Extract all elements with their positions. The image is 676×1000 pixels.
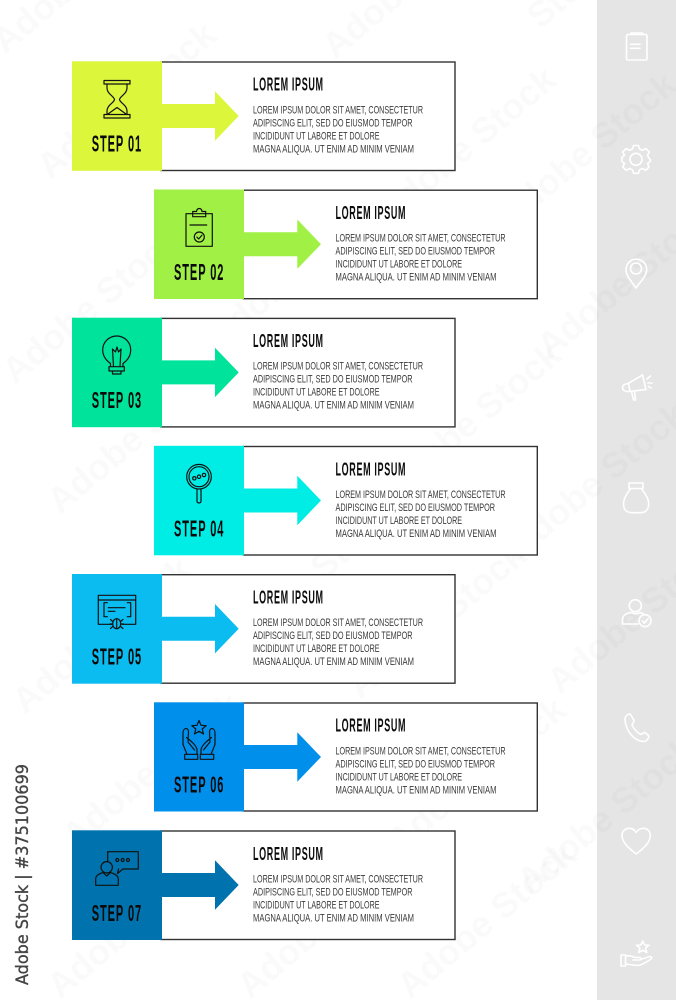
arrow: step 07 bbox=[161, 860, 239, 910]
text block: LOREM IPSUM DOLOR SIT AMET, CONSECTETUR bbox=[253, 617, 423, 629]
icon: magnifier bbox=[187, 464, 211, 503]
text block bbox=[336, 232, 506, 284]
panel: step 01 bbox=[72, 61, 455, 171]
text block: ADIPISCING ELIT, SED DO EIUSMOD TEMPOR bbox=[253, 630, 412, 642]
text block: LOREM IPSUM DOLOR SIT AMET, CONSECTETUR bbox=[253, 104, 423, 116]
step label: STEP 02 bbox=[174, 260, 223, 285]
arrow: step 03 bbox=[161, 348, 239, 397]
icon: code window with bug bbox=[98, 595, 136, 629]
icon: sidebar clipboard bbox=[626, 33, 647, 60]
text block: ADIPISCING ELIT, SED DO EIUSMOD TEMPOR bbox=[336, 246, 495, 258]
arrow: step 01 bbox=[161, 91, 239, 141]
text block: ADIPISCING ELIT, SED DO EIUSMOD TEMPOR bbox=[253, 117, 412, 129]
text block: INCIDIDUNT UT LABORE ET DOLORE bbox=[336, 515, 462, 527]
step label: STEP 04 bbox=[174, 516, 223, 541]
text block: MAGNA ALIQUA. UT ENIM AD MINIM VENIAM bbox=[253, 143, 414, 155]
icon: sidebar heart bbox=[622, 828, 650, 854]
icon: hourglass bbox=[104, 80, 130, 118]
text block: INCIDIDUNT UT LABORE ET DOLORE bbox=[336, 258, 462, 270]
text block bbox=[253, 873, 423, 924]
icon: light bulb bbox=[103, 336, 131, 374]
text block: LOREM IPSUM DOLOR SIT AMET, CONSECTETUR bbox=[336, 745, 506, 757]
text block bbox=[253, 361, 423, 412]
text block: INCIDIDUNT UT LABORE ET DOLORE bbox=[253, 130, 380, 142]
panel: right sidebar bbox=[597, 0, 676, 1000]
text block: INCIDIDUNT UT LABORE ET DOLORE bbox=[336, 771, 462, 783]
step label: STEP 07 bbox=[92, 900, 141, 926]
panel: step 07 bbox=[72, 830, 455, 940]
icon: sidebar megaphone bbox=[622, 375, 652, 400]
icon: sidebar money bag bbox=[624, 483, 649, 513]
text block: MAGNA ALIQUA. UT ENIM AD MINIM VENIAM bbox=[336, 528, 496, 540]
text block: LOREM IPSUM DOLOR SIT AMET, CONSECTETUR bbox=[336, 232, 506, 244]
arrow: step 05 bbox=[161, 604, 239, 653]
icon: clipboard bbox=[186, 208, 212, 246]
text block bbox=[336, 745, 506, 796]
text block: MAGNA ALIQUA. UT ENIM AD MINIM VENIAM bbox=[253, 400, 414, 412]
panel: step 03 bbox=[72, 318, 455, 427]
icon: sidebar location pin bbox=[626, 259, 647, 288]
step label: STEP 06 bbox=[174, 772, 223, 798]
text block: ADIPISCING ELIT, SED DO EIUSMOD TEMPOR bbox=[253, 374, 412, 386]
step label: STEP 05 bbox=[92, 644, 141, 670]
panel: step 05 bbox=[72, 574, 455, 684]
text block: ADIPISCING ELIT, SED DO EIUSMOD TEMPOR bbox=[336, 758, 495, 770]
arrow: step 06 bbox=[243, 732, 321, 782]
icon: sidebar gear bbox=[622, 146, 650, 173]
heading: LOREM IPSUM bbox=[253, 845, 323, 865]
icon: person with speech bubble bbox=[96, 852, 138, 885]
credit: vertical stock id: Adobe Stock | #375100699 bbox=[13, 764, 33, 985]
text block: INCIDIDUNT UT LABORE ET DOLORE bbox=[253, 643, 380, 655]
step label: STEP 01 bbox=[92, 131, 141, 157]
icon: sidebar user with check bbox=[622, 600, 651, 627]
text block bbox=[336, 489, 506, 540]
text block: LOREM IPSUM DOLOR SIT AMET, CONSECTETUR bbox=[253, 361, 423, 373]
heading: LOREM IPSUM bbox=[253, 76, 323, 96]
text block: LOREM IPSUM DOLOR SIT AMET, CONSECTETUR bbox=[336, 489, 506, 501]
icon: sidebar hand with star bbox=[621, 941, 652, 966]
arrow: step 02 bbox=[243, 220, 321, 269]
arrow: step 04 bbox=[243, 476, 321, 525]
text block: MAGNA ALIQUA. UT ENIM AD MINIM VENIAM bbox=[336, 784, 496, 796]
text block: MAGNA ALIQUA. UT ENIM AD MINIM VENIAM bbox=[336, 272, 496, 284]
text block: MAGNA ALIQUA. UT ENIM AD MINIM VENIAM bbox=[253, 912, 414, 924]
panel: step 06 bbox=[154, 702, 537, 812]
text block: ADIPISCING ELIT, SED DO EIUSMOD TEMPOR bbox=[253, 886, 412, 898]
text block: INCIDIDUNT UT LABORE ET DOLORE bbox=[253, 387, 380, 399]
heading: LOREM IPSUM bbox=[253, 332, 323, 352]
icon: sidebar phone bbox=[625, 714, 649, 742]
heading: LOREM IPSUM bbox=[253, 588, 323, 609]
text block: ADIPISCING ELIT, SED DO EIUSMOD TEMPOR bbox=[336, 502, 495, 514]
step label: STEP 03 bbox=[92, 388, 141, 413]
icon: hands with star bbox=[183, 720, 215, 759]
heading: LOREM IPSUM bbox=[336, 460, 406, 480]
text block: MAGNA ALIQUA. UT ENIM AD MINIM VENIAM bbox=[253, 656, 414, 668]
text block bbox=[253, 617, 423, 668]
panel: step 04 bbox=[154, 446, 537, 555]
panel: step 02 bbox=[154, 190, 537, 299]
heading: LOREM IPSUM bbox=[336, 717, 406, 737]
text block: INCIDIDUNT UT LABORE ET DOLORE bbox=[253, 899, 380, 911]
text block bbox=[253, 104, 423, 155]
heading: LOREM IPSUM bbox=[336, 204, 406, 224]
text block: LOREM IPSUM DOLOR SIT AMET, CONSECTETUR bbox=[253, 873, 423, 885]
